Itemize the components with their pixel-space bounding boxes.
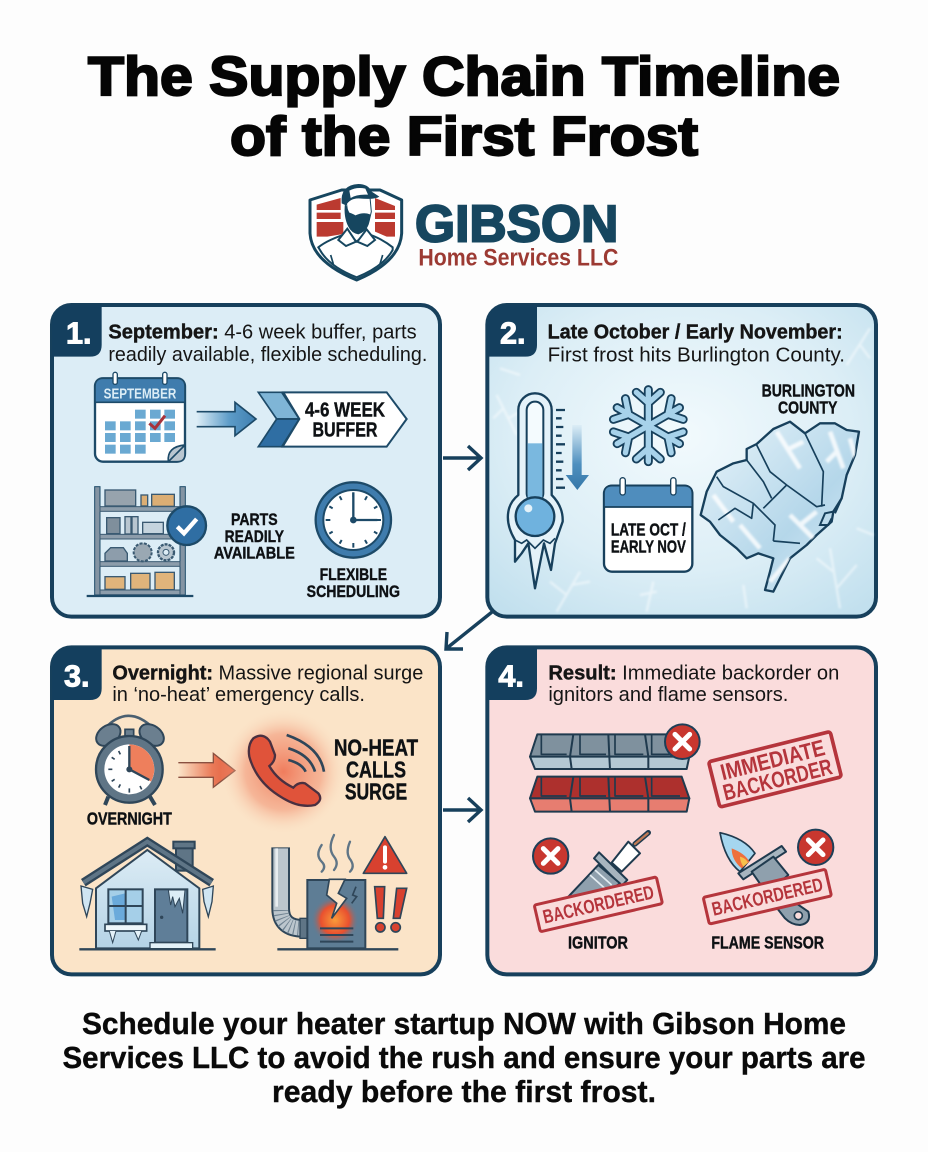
step number 4 <box>487 647 537 700</box>
panel background <box>52 647 440 974</box>
call to action: Services LLC to avoid the rush and ensure your parts are <box>62 1040 866 1075</box>
heading text: Result: Immediate backorder on <box>548 662 839 684</box>
icon: late Oct / early Nov calendar <box>604 478 692 572</box>
call to action <box>62 1006 866 1109</box>
title: of the First Frost <box>230 105 698 167</box>
icon: ringing phone with glow <box>220 708 347 835</box>
label: Burlington County: COUNTY <box>778 397 838 417</box>
label: overnight: OVERNIGHT <box>87 808 172 828</box>
label: flexible scheduling: FLEXIBLE <box>320 565 387 584</box>
heading text: ignitors and flame sensors. <box>548 684 788 706</box>
icon: snowflake <box>611 390 686 462</box>
label: flexible scheduling: SCHEDULING <box>307 582 400 601</box>
stamp: backordered (flame sensor) <box>703 869 831 924</box>
label: parts readily available: PARTS <box>231 510 278 529</box>
chevron: 4-6 week buffer: BUFFER <box>312 420 378 442</box>
label: Burlington County: BURLINGTON <box>762 381 855 401</box>
label: no-heat calls surge <box>334 735 418 804</box>
arrow: step 1 to step 2 <box>443 446 481 470</box>
icon: empty red parts bins <box>530 777 689 812</box>
icon: availability check badge <box>167 506 206 545</box>
icon: late Oct / early Nov calendar: EARLY NOV <box>611 536 686 556</box>
label: parts readily available: AVAILABLE <box>214 544 295 563</box>
icon: alarm clock <box>92 716 168 805</box>
heading text <box>108 321 427 366</box>
panel 1: September <box>52 305 440 617</box>
arrow <box>178 753 235 787</box>
heading text: in ‘no-heat’ emergency calls. <box>112 684 365 706</box>
label: flexible scheduling <box>307 565 400 601</box>
title: The Supply Chain Timeline <box>88 45 840 107</box>
title <box>88 45 840 167</box>
heading text: First frost hits Burlington County. <box>548 345 845 367</box>
step number 2 <box>487 305 537 357</box>
icon: ignitor <box>568 833 648 903</box>
label: Burlington County <box>762 381 855 417</box>
chevron: 4-6 week buffer <box>258 392 407 447</box>
stamp: backordered (ignitor): BACKORDERED <box>541 882 656 928</box>
step number 3: 3. <box>64 660 90 694</box>
heading text: readily available, flexible scheduling. <box>108 344 427 366</box>
panel 3: overnight <box>52 647 440 974</box>
label: ignitor: IGNITOR <box>568 932 628 952</box>
label: no-heat calls surge: NO-HEAT <box>334 735 418 761</box>
stamp: immediate backorder: BACKORDER <box>720 753 835 805</box>
icon: empty grey parts bins <box>530 734 689 769</box>
temperature scale ticks <box>556 410 565 488</box>
heading text <box>548 662 839 706</box>
map: Burlington County <box>701 422 859 592</box>
heading text <box>548 321 845 367</box>
panel background <box>487 305 876 617</box>
call to action: Schedule your heater startup NOW with Gibson Home <box>82 1006 846 1041</box>
arrow <box>197 402 256 436</box>
arrow: step 3 to step 4 <box>443 798 481 822</box>
arrow: falling temperature <box>566 425 589 490</box>
panel 2: first frost <box>487 305 876 617</box>
icon: flame sensor <box>720 833 809 925</box>
step number 3 <box>52 647 102 700</box>
step number 2: 2. <box>500 316 526 350</box>
label: parts readily available <box>214 510 295 563</box>
icon: failed furnace <box>277 835 407 949</box>
icon: September calendar: SEPTEMBER <box>104 386 177 402</box>
label: no-heat calls surge: SURGE <box>345 778 407 804</box>
icon: parts shelf <box>87 487 193 596</box>
panel background <box>52 305 440 617</box>
heading text: September: 4-6 week buffer, parts <box>108 321 417 343</box>
stamp: backordered (flame sensor): BACKORDERED <box>710 875 825 921</box>
panel background <box>487 647 876 974</box>
tagline: Home Services LLC <box>418 244 618 271</box>
icon: X mark on bins <box>665 724 700 759</box>
icon: frozen thermometer <box>508 393 563 588</box>
step number 4: 4. <box>498 660 524 694</box>
heading text <box>112 662 423 706</box>
icon: X mark on ignitor <box>533 838 568 874</box>
wordmark: GIBSON <box>415 195 618 253</box>
label: parts readily available: READILY <box>225 527 284 546</box>
step number 1: 1. <box>66 316 92 350</box>
panel 4: result <box>487 647 876 974</box>
step number 1 <box>52 305 102 357</box>
label: no-heat calls surge: CALLS <box>346 756 406 782</box>
call to action: ready before the first frost. <box>272 1074 656 1109</box>
stamp: immediate backorder <box>709 732 841 807</box>
arrow: step 2 to step 3 <box>446 612 492 649</box>
stamp: backordered (ignitor) <box>534 877 662 932</box>
icon: shield with technician <box>310 184 402 280</box>
logo: Gibson Home Services LLC <box>310 184 618 280</box>
heading text: Overnight: Massive regional surge <box>112 662 423 684</box>
icon: X mark on flame sensor <box>798 830 833 865</box>
chevron: 4-6 week buffer: 4-6 WEEK <box>305 400 385 422</box>
stamp: immediate backorder: IMMEDIATE <box>718 734 827 785</box>
icon: frozen house <box>79 842 216 949</box>
heading text: Late October / Early November: <box>548 321 843 343</box>
label: flame sensor: FLAME SENSOR <box>711 932 824 952</box>
icon: late Oct / early Nov calendar: LATE OCT / <box>611 520 686 540</box>
icon: clock <box>316 482 391 558</box>
icon: September calendar <box>95 372 185 462</box>
